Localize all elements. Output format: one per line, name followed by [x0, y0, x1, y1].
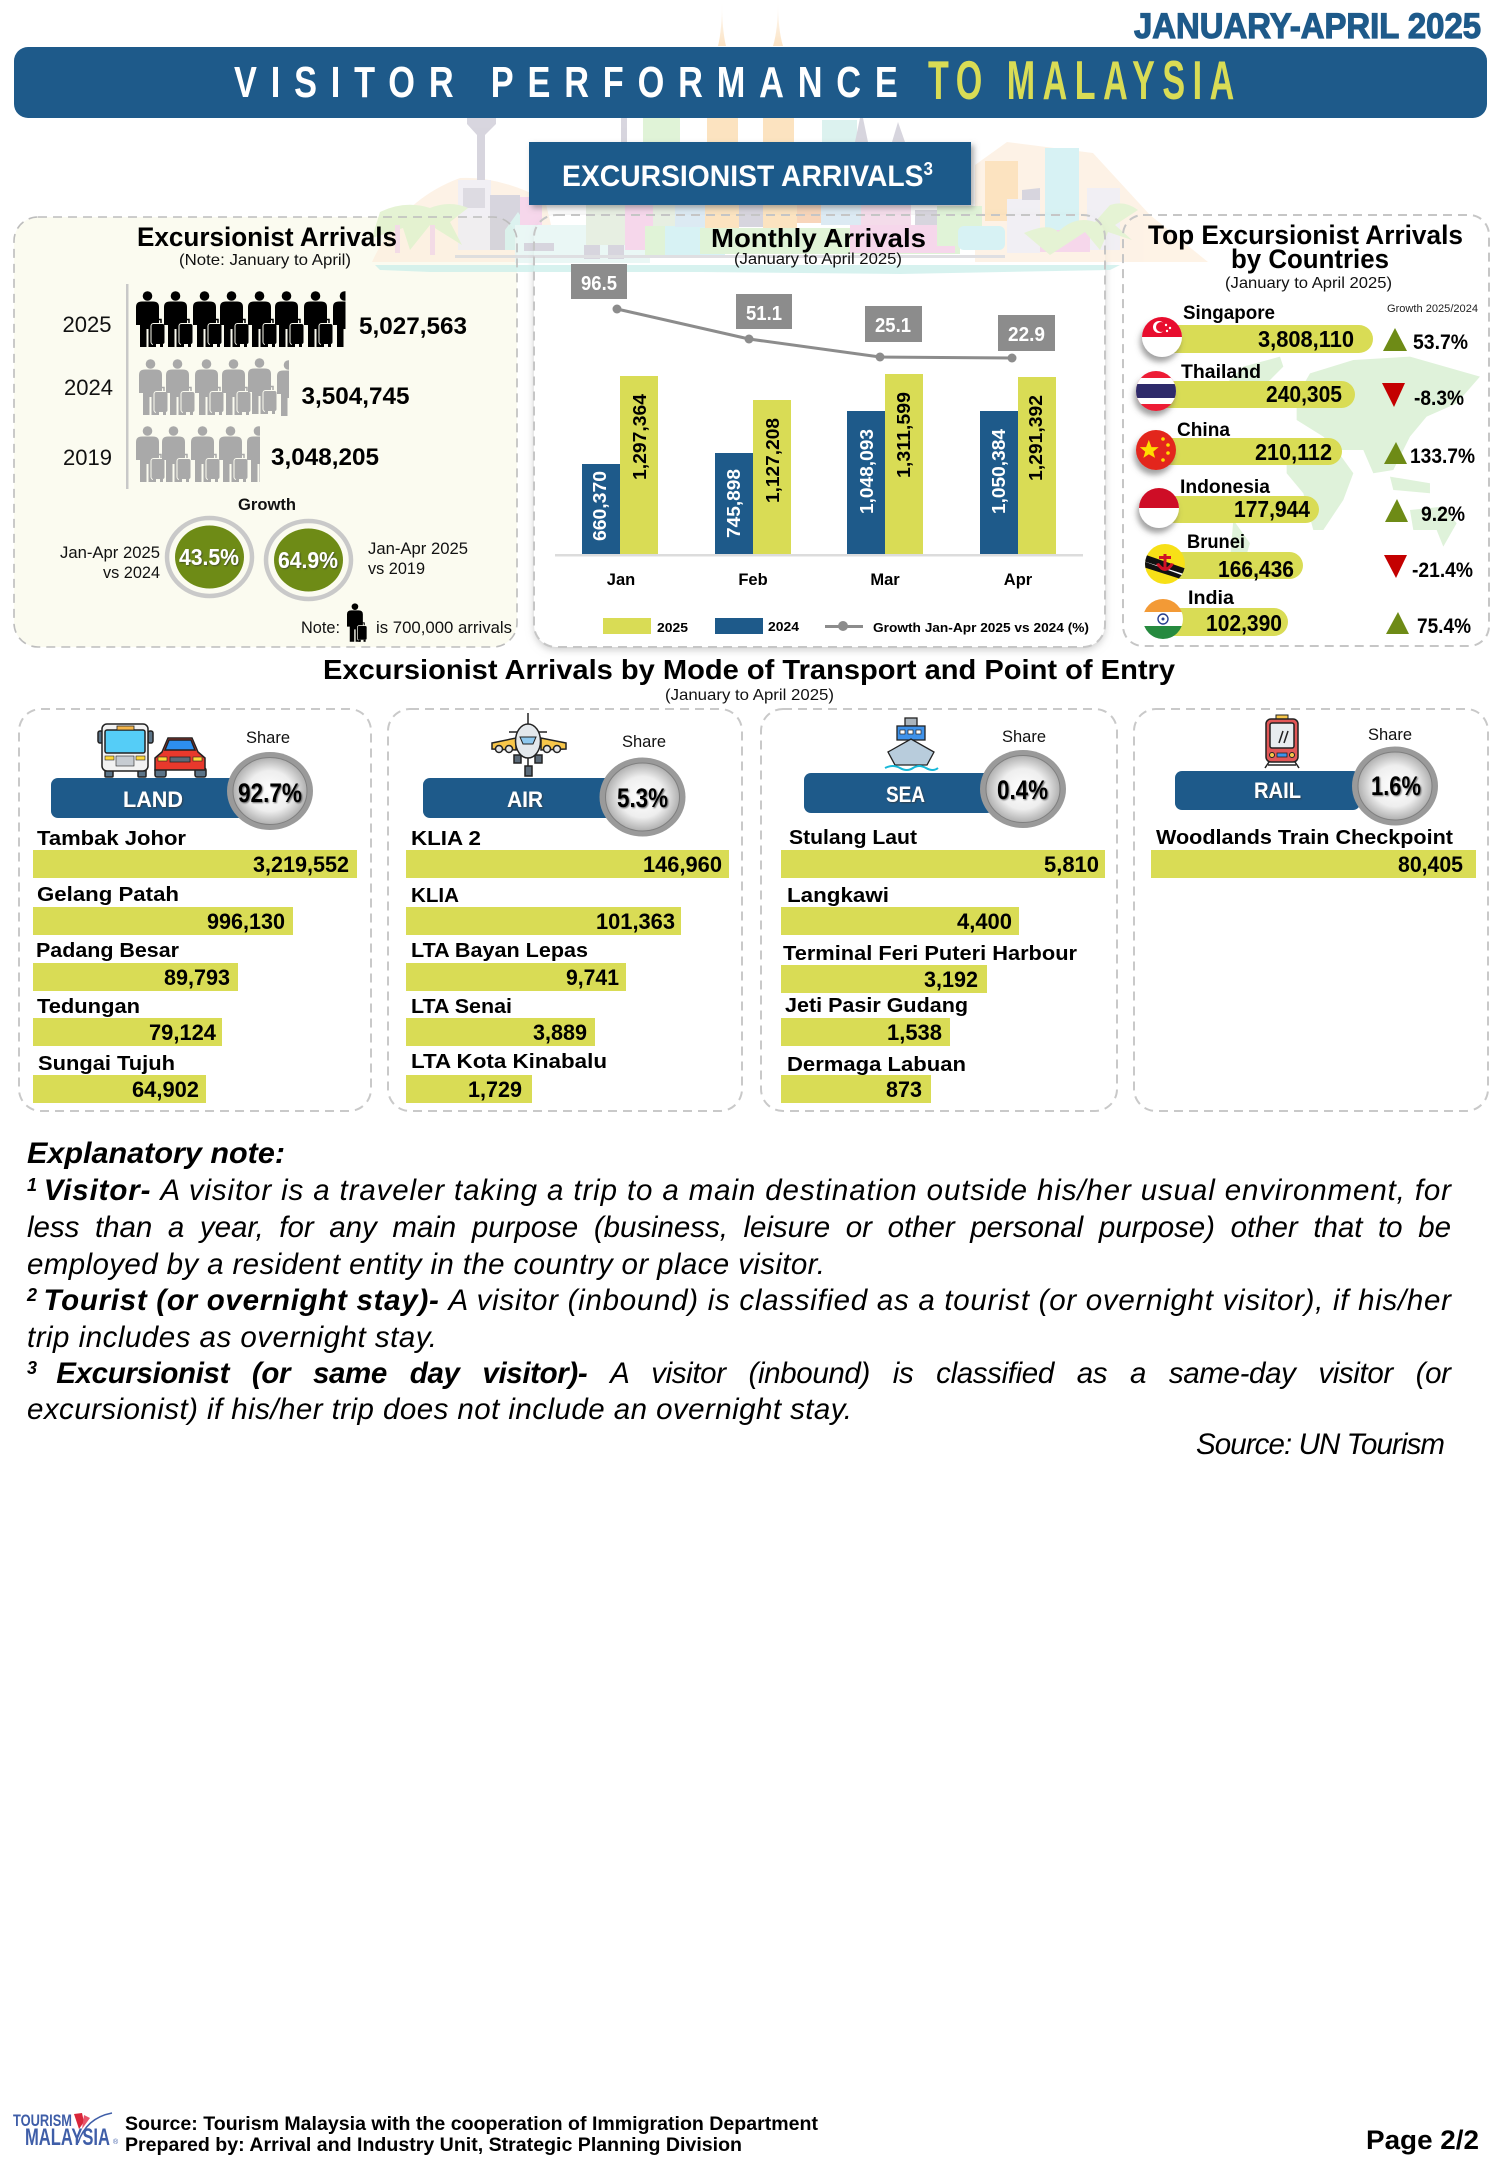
icon: ship: [885, 718, 938, 770]
pictogram note: is 700,000 arrivals: [376, 619, 512, 637]
title banner: VISITOR PERFORMANCE: [234, 58, 898, 107]
panel: air: LTA Senai: [411, 996, 512, 1018]
growth labels: 22.9: [1008, 324, 1045, 346]
panel: excursionist arrivals background: [14, 217, 517, 647]
panel: air: 1,729: [468, 1077, 522, 1102]
explanatory note: Tourist (or overnight stay)-: [43, 1284, 448, 1317]
explanatory note: Excursionist (or same day visitor)-: [56, 1357, 611, 1390]
totals: [271, 313, 467, 471]
share: Share: [1002, 727, 1046, 746]
panel: sea: 5,810: [1044, 852, 1099, 877]
pictogram row 2019: [136, 426, 260, 482]
year labels: 2024: [64, 375, 113, 400]
heading: Top Excursionist Arrivals: [1148, 220, 1463, 250]
section heading: mode of transport: [323, 654, 1175, 704]
row: China: [1136, 420, 1475, 470]
panel: rail: [1134, 709, 1488, 1111]
row: Thailand: [1136, 362, 1464, 411]
panel content: top countries: by Countries: [1231, 244, 1389, 274]
panel: air: 101,363: [596, 909, 675, 934]
growth labels: 25.1: [875, 315, 911, 337]
panel: sea: 4,400: [957, 909, 1012, 934]
panel: air: KLIA 2: [411, 828, 481, 850]
bar values: [590, 392, 1046, 541]
bar values: 1,048,093: [857, 429, 877, 514]
heading: Excursionist Arrivals: [137, 222, 397, 252]
explanatory note: employed by a resident entity in the country or place visitor.: [27, 1248, 825, 1281]
explanatory note: trip includes as overnight stay.: [27, 1321, 437, 1354]
mode label: [1175, 771, 1360, 810]
explanatory note: excursionist) if his/her trip does not include an overnight stay.: [27, 1393, 852, 1426]
panel: air: LTA Kota Kinabalu: [411, 1051, 607, 1073]
logo: Tourism Malaysia: TOURISM: [13, 2111, 72, 2130]
growth circle 2019: 64.9%: [278, 547, 338, 573]
panel: land: Tambak Johor: [37, 828, 186, 850]
section banner: excursionist arrivals: EXCURSIONIST ARRIVALS: [562, 160, 945, 193]
panel: land: 996,130: [207, 909, 285, 934]
heading: Monthly Arrivals: [711, 223, 926, 253]
mode label: [51, 778, 246, 818]
panel: rail: 80,405: [1398, 852, 1463, 877]
share: Share: [1368, 725, 1412, 744]
totals: 3,504,745: [302, 383, 410, 410]
panel content: monthly arrivals chart: [555, 223, 1089, 635]
panel: land: 79,124: [149, 1020, 217, 1045]
row: Singapore: 53.7%: [1413, 331, 1468, 354]
month labels: Apr: [1004, 571, 1033, 589]
growth labels: [571, 264, 1055, 351]
panel: sea: 3,192: [924, 967, 978, 992]
row: Brunei: -21.4%: [1412, 559, 1473, 582]
growth captions: [60, 540, 468, 582]
panel: sea: 873: [886, 1077, 922, 1102]
growth caption: Growth 2025/2024: [1387, 303, 1478, 315]
row: Thailand: -8.3%: [1414, 387, 1464, 410]
icon: bus: [98, 724, 153, 777]
entry points: [1151, 850, 1476, 878]
panel: top countries background: [1123, 215, 1489, 646]
pictogram row 2024: [139, 358, 306, 416]
panel: rail: Woodlands Train Checkpoint: [1156, 827, 1453, 849]
legend: [603, 618, 1089, 635]
panel: rail: 1.6%: [1371, 771, 1421, 801]
share: Share: [246, 728, 290, 747]
bar values: 1,050,384: [989, 429, 1009, 514]
bar values: 745,898: [724, 469, 744, 538]
entry points: [406, 850, 729, 1103]
panel: air: 3,889: [533, 1020, 587, 1045]
explanatory note: Visitor-: [44, 1174, 159, 1207]
growth labels: 96.5: [581, 273, 617, 295]
axis line: [126, 284, 128, 489]
panel: air: LTA Bayan Lepas: [411, 940, 588, 962]
section heading: mode of transport: (January to April 2025): [665, 687, 834, 704]
icon: train: [1265, 715, 1299, 768]
pictogram note: [301, 603, 512, 642]
bars 2024: [582, 411, 1018, 555]
month labels: [607, 571, 1033, 589]
subheading: (Note: January to April): [179, 252, 351, 269]
mode label: [804, 773, 994, 813]
row: Singapore: 3,808,110: [1258, 326, 1354, 352]
growth circle 2019: [266, 521, 351, 599]
logo: Tourism Malaysia: MALAYSIA: [25, 2124, 110, 2151]
city skyline illustration: [372, 0, 1208, 274]
panel: land: [19, 709, 371, 1111]
bar values: 660,370: [590, 471, 610, 541]
panel: monthly arrivals background: [534, 215, 1105, 647]
totals: 5,027,563: [359, 313, 467, 340]
date heading: JANUARY-APRIL 2025: [1134, 7, 1481, 46]
subheading: (January to April 2025): [734, 251, 902, 268]
explanatory note: Source: UN Tourism: [1196, 1428, 1445, 1461]
growth captions: vs 2024: [103, 564, 160, 582]
year labels: 2025: [62, 312, 112, 337]
bars 2025: [620, 374, 1056, 555]
month labels: Mar: [870, 571, 900, 589]
panel: air: KLIA: [411, 885, 459, 907]
row: Brunei: 166,436: [1218, 556, 1294, 582]
row: China: 210,112: [1255, 439, 1332, 465]
row: Indonesia: 177,944: [1234, 496, 1310, 522]
growth captions: Jan-Apr 2025: [60, 544, 160, 562]
explanatory note: A visitor (inbound) is classified as a same-day visitor (or: [610, 1357, 1451, 1390]
logo: Tourism Malaysia: ®: [113, 2138, 119, 2146]
explanatory note: [26, 1137, 1452, 1461]
panel: land: Sungai Tujuh: [38, 1053, 175, 1075]
section heading: mode of transport: Excursionist Arrivals by Mode of Transport and Point of Entry: [323, 654, 1175, 685]
panel: sea: Terminal Feri Puteri Harbour: [783, 943, 1077, 965]
legend: 2025: [657, 620, 688, 635]
explanatory note: 3: [27, 1358, 57, 1378]
panel: sea: Dermaga Labuan: [787, 1054, 966, 1076]
row: Brunei: Brunei: [1187, 532, 1245, 553]
chart baseline: [555, 554, 1083, 556]
section banner: excursionist arrivals: [529, 142, 971, 205]
panel: sea: 0.4%: [997, 775, 1048, 805]
panel: rail: RAIL: [1254, 778, 1301, 803]
pictogram note: Note:: [301, 619, 340, 637]
growth circle 2024: 43.5%: [179, 544, 239, 570]
growth captions: Jan-Apr 2025: [368, 540, 468, 558]
row: India: India: [1188, 588, 1234, 609]
bar values: 1,311,599: [894, 392, 914, 478]
icon: car: [155, 738, 206, 777]
panel content: top countries: [1136, 220, 1480, 640]
panel: air: 146,960: [643, 852, 722, 877]
panel: sea: [761, 709, 1117, 1111]
row: Indonesia: Indonesia: [1180, 477, 1270, 498]
bar values: 1,291,392: [1026, 395, 1046, 481]
panel: air: AIR: [507, 787, 543, 812]
panel content: excursionist arrivals: [60, 222, 512, 642]
row: China: 133.7%: [1410, 445, 1475, 468]
panel: land: Tedungan: [37, 996, 140, 1018]
explanatory note: Explanatory note:: [27, 1137, 285, 1170]
share: Share: [622, 732, 666, 751]
explanatory note: less than a year, for any main purpose (business, leisure or other personal purpose) other that to be: [27, 1211, 1451, 1244]
world map: [1227, 357, 1480, 577]
section banner: excursionist arrivals: 3: [924, 159, 933, 179]
pictogram row 2025: [136, 291, 362, 347]
month labels: Jan: [607, 571, 635, 589]
explanatory note: 2: [26, 1285, 43, 1305]
year labels: 2019: [63, 445, 112, 470]
footer source text: Prepared by: Arrival and Industry Unit, Strategic Planning Division: [125, 2135, 742, 2156]
icon: plane: [492, 713, 566, 776]
panel: land: Gelang Patah: [37, 884, 179, 906]
title banner: [14, 47, 1487, 118]
panel: sea: Langkawi: [787, 885, 889, 907]
year labels: [62, 312, 113, 470]
row: Singapore: [1142, 303, 1468, 357]
page number: Page 2/2: [1366, 2125, 1479, 2155]
logo: Tourism Malaysia: [13, 2111, 119, 2151]
panel: air: 9,741: [566, 965, 619, 990]
footer source text: Source: Tourism Malaysia with the cooperation of Immigration Department: [125, 2114, 819, 2135]
row: China: China: [1177, 420, 1230, 441]
growth label: Growth: [238, 496, 296, 514]
panel: sea: SEA: [886, 782, 925, 807]
entry points: [33, 850, 357, 1103]
panel: air: [388, 709, 742, 1111]
bar values: 1,297,364: [630, 394, 650, 480]
row: Thailand: 240,305: [1266, 381, 1342, 407]
panel: land: 89,793: [164, 965, 230, 990]
row: Indonesia: [1139, 477, 1465, 528]
panel: land: 92.7%: [238, 778, 302, 808]
title banner: TO MALAYSIA: [928, 50, 1234, 111]
subheading: (January to April 2025): [1225, 275, 1392, 292]
explanatory note: A visitor is a traveler taking a trip to a main destination outside his/her usual environment, for: [160, 1174, 1451, 1207]
growth circle 2024: [167, 518, 252, 596]
panel: sea: Stulang Laut: [789, 827, 917, 849]
explanatory note: A visitor (inbound) is classified as a tourist (or overnight visitor), if his/her: [448, 1284, 1451, 1317]
row: India: [1143, 588, 1471, 640]
entry points: [781, 850, 1105, 1103]
panel: sea: 1,538: [887, 1020, 942, 1045]
bar values: 1,127,208: [763, 418, 783, 503]
totals: 3,048,205: [271, 444, 379, 471]
row: Thailand: Thailand: [1181, 362, 1261, 383]
growth line: [612, 304, 1016, 362]
footer source text: [125, 2114, 819, 2156]
explanatory note: 1: [27, 1175, 43, 1195]
panel: land: LAND: [123, 787, 183, 812]
panel: land: Padang Besar: [36, 940, 179, 962]
panel: air: 5.3%: [617, 783, 668, 813]
panel: land: 3,219,552: [253, 852, 349, 877]
panel: sea: Jeti Pasir Gudang: [785, 995, 968, 1017]
row: Indonesia: 9.2%: [1421, 503, 1465, 526]
growth captions: vs 2019: [368, 560, 425, 578]
growth labels: 51.1: [746, 303, 782, 325]
month labels: Feb: [738, 571, 768, 589]
row: India: 102,390: [1206, 610, 1282, 636]
legend: 2024: [768, 619, 800, 634]
row: Singapore: Singapore: [1183, 303, 1275, 324]
panel: land: 64,902: [132, 1077, 199, 1102]
row: Brunei: [1143, 532, 1473, 584]
legend: Growth Jan-Apr 2025 vs 2024 (%): [873, 620, 1089, 635]
row: India: 75.4%: [1417, 615, 1471, 638]
mode label: [423, 778, 613, 818]
